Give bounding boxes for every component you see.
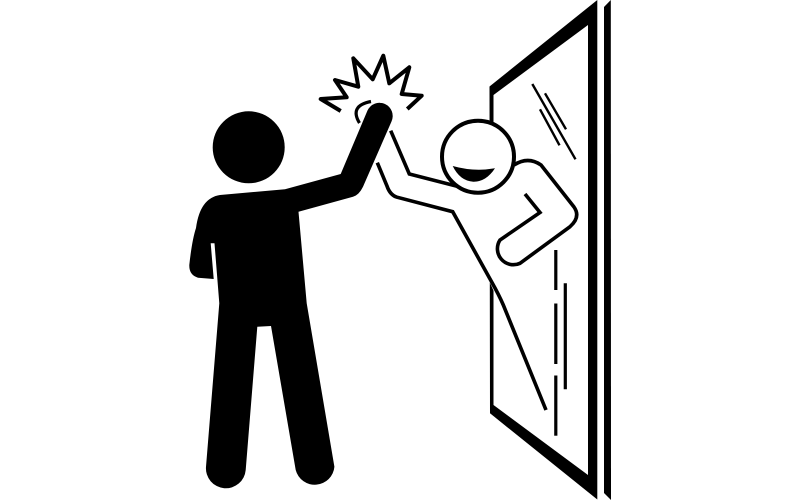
- head: [213, 111, 285, 183]
- body with raised arm and legs: [189, 103, 393, 488]
- reflection body and arm: [377, 131, 577, 410]
- lower scratches: [556, 250, 565, 436]
- burst rays: [321, 56, 422, 111]
- impact arc: [356, 102, 371, 123]
- solid figure: [189, 103, 393, 488]
- glass scratches: [532, 84, 576, 436]
- reflection outline: [391, 131, 462, 188]
- reflection smile: [453, 166, 495, 182]
- mirror frame: [490, 0, 611, 500]
- upper scratches: [532, 84, 576, 159]
- clap burst: [321, 56, 422, 123]
- mirror side edge: [604, 0, 611, 500]
- reflection bent arm: [497, 160, 577, 265]
- reflection lower arm and torso line: [377, 163, 546, 410]
- reflection head: [442, 121, 514, 193]
- reflected figure: [377, 121, 577, 410]
